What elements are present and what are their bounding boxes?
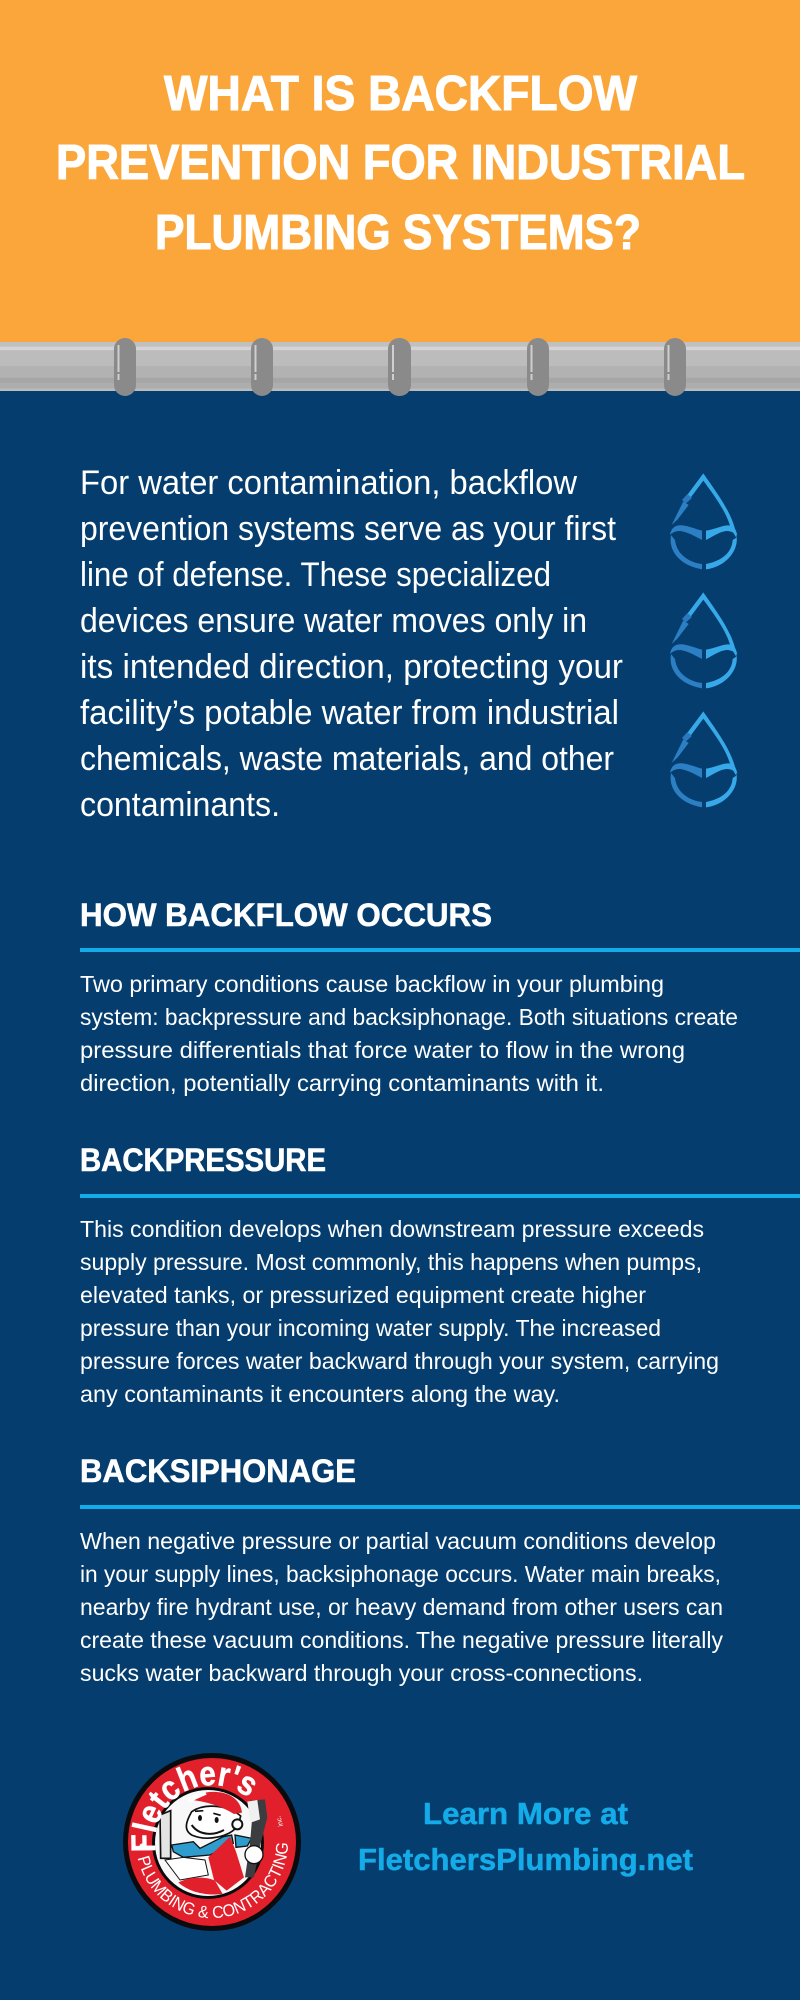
intro paragraph: devices ensure water moves only in [80,602,587,640]
intro paragraph: prevention systems serve as your first [80,510,617,548]
body text: backpressure [80,1216,719,1407]
body text: backsiphonage: nearby fire hydrant use, or heavy demand from other users can [80,1594,723,1620]
title: PLUMBING SYSTEMS? [155,206,641,260]
logo: Fletcher's Plumbing & Contracting [123,1753,301,1931]
body text: backpressure: supply pressure. Most commonly, this happens when pumps, [80,1249,702,1275]
header panel [0,0,800,342]
body text: backpressure: This condition develops when downstream pressure exceeds [80,1216,704,1242]
title: PREVENTION FOR INDUSTRIAL [56,136,745,190]
icon: water drop 1 [670,473,737,569]
intro paragraph [80,464,623,824]
body text: backpressure: pressure than your incoming water supply. The increased [80,1315,661,1341]
body text: backsiphonage: When negative pressure or partial vacuum conditions develop [80,1528,716,1554]
body text: how backflow occurs: pressure differentials that force water to flow in the wrong [80,1037,685,1063]
intro paragraph: chemicals, waste materials, and other [80,740,614,778]
heading: backpressure: BACKPRESSURE [80,1142,326,1178]
call to action: FletchersPlumbing.net [358,1842,693,1877]
icon: water drop 2 [670,592,737,688]
icon: water drop 3 [670,711,737,807]
call to action [358,1796,693,1877]
intro paragraph: contaminants. [80,786,280,824]
section: backpressure [80,1142,800,1407]
heading: backsiphonage: BACKSIPHONAGE [80,1453,356,1489]
mascot [160,1791,267,1895]
body text: how backflow occurs: Two primary conditions cause backflow in your plumbing [80,971,664,997]
call to action: Learn More at [423,1796,628,1831]
section: backsiphonage [80,1453,800,1686]
body text: backpressure: pressure forces water backward through your system, carrying [80,1348,719,1374]
body text: how backflow occurs: direction, potentially carrying contaminants with it. [80,1070,604,1096]
body text: backsiphonage: in your supply lines, backsiphonage occurs. Water main breaks, [80,1561,721,1587]
body text: backsiphonage: create these vacuum conditions. The negative pressure literally [80,1627,723,1653]
logo wordmark: Fletcher's [131,1765,256,1851]
body text: backpressure: elevated tanks, or pressurized equipment create higher [80,1282,646,1308]
body text: backsiphonage: sucks water backward through your cross-connections. [80,1660,643,1686]
heading: how backflow occurs: HOW BACKFLOW OCCURS [80,897,492,933]
intro paragraph: For water contamination, backflow [80,464,577,502]
body text: how backflow occurs [80,971,738,1096]
intro paragraph: facility’s potable water from industrial [80,694,619,732]
logo tagline: PLUMBING & CONTRACTING [138,1843,288,1918]
title [56,67,745,260]
logo inc mark: inc. [278,1816,283,1827]
section: how backflow occurs [80,897,800,1096]
title: WHAT IS BACKFLOW [164,67,638,121]
intro paragraph: its intended direction, protecting your [80,648,623,686]
body text: backpressure: any contaminants it encounters along the way. [80,1381,560,1407]
pipe with clamps [0,338,800,396]
body text: how backflow occurs: system: backpressure and backsiphonage. Both situations create [80,1004,738,1030]
intro paragraph: line of defense. These specialized [80,556,551,594]
body text: backsiphonage [80,1528,723,1686]
